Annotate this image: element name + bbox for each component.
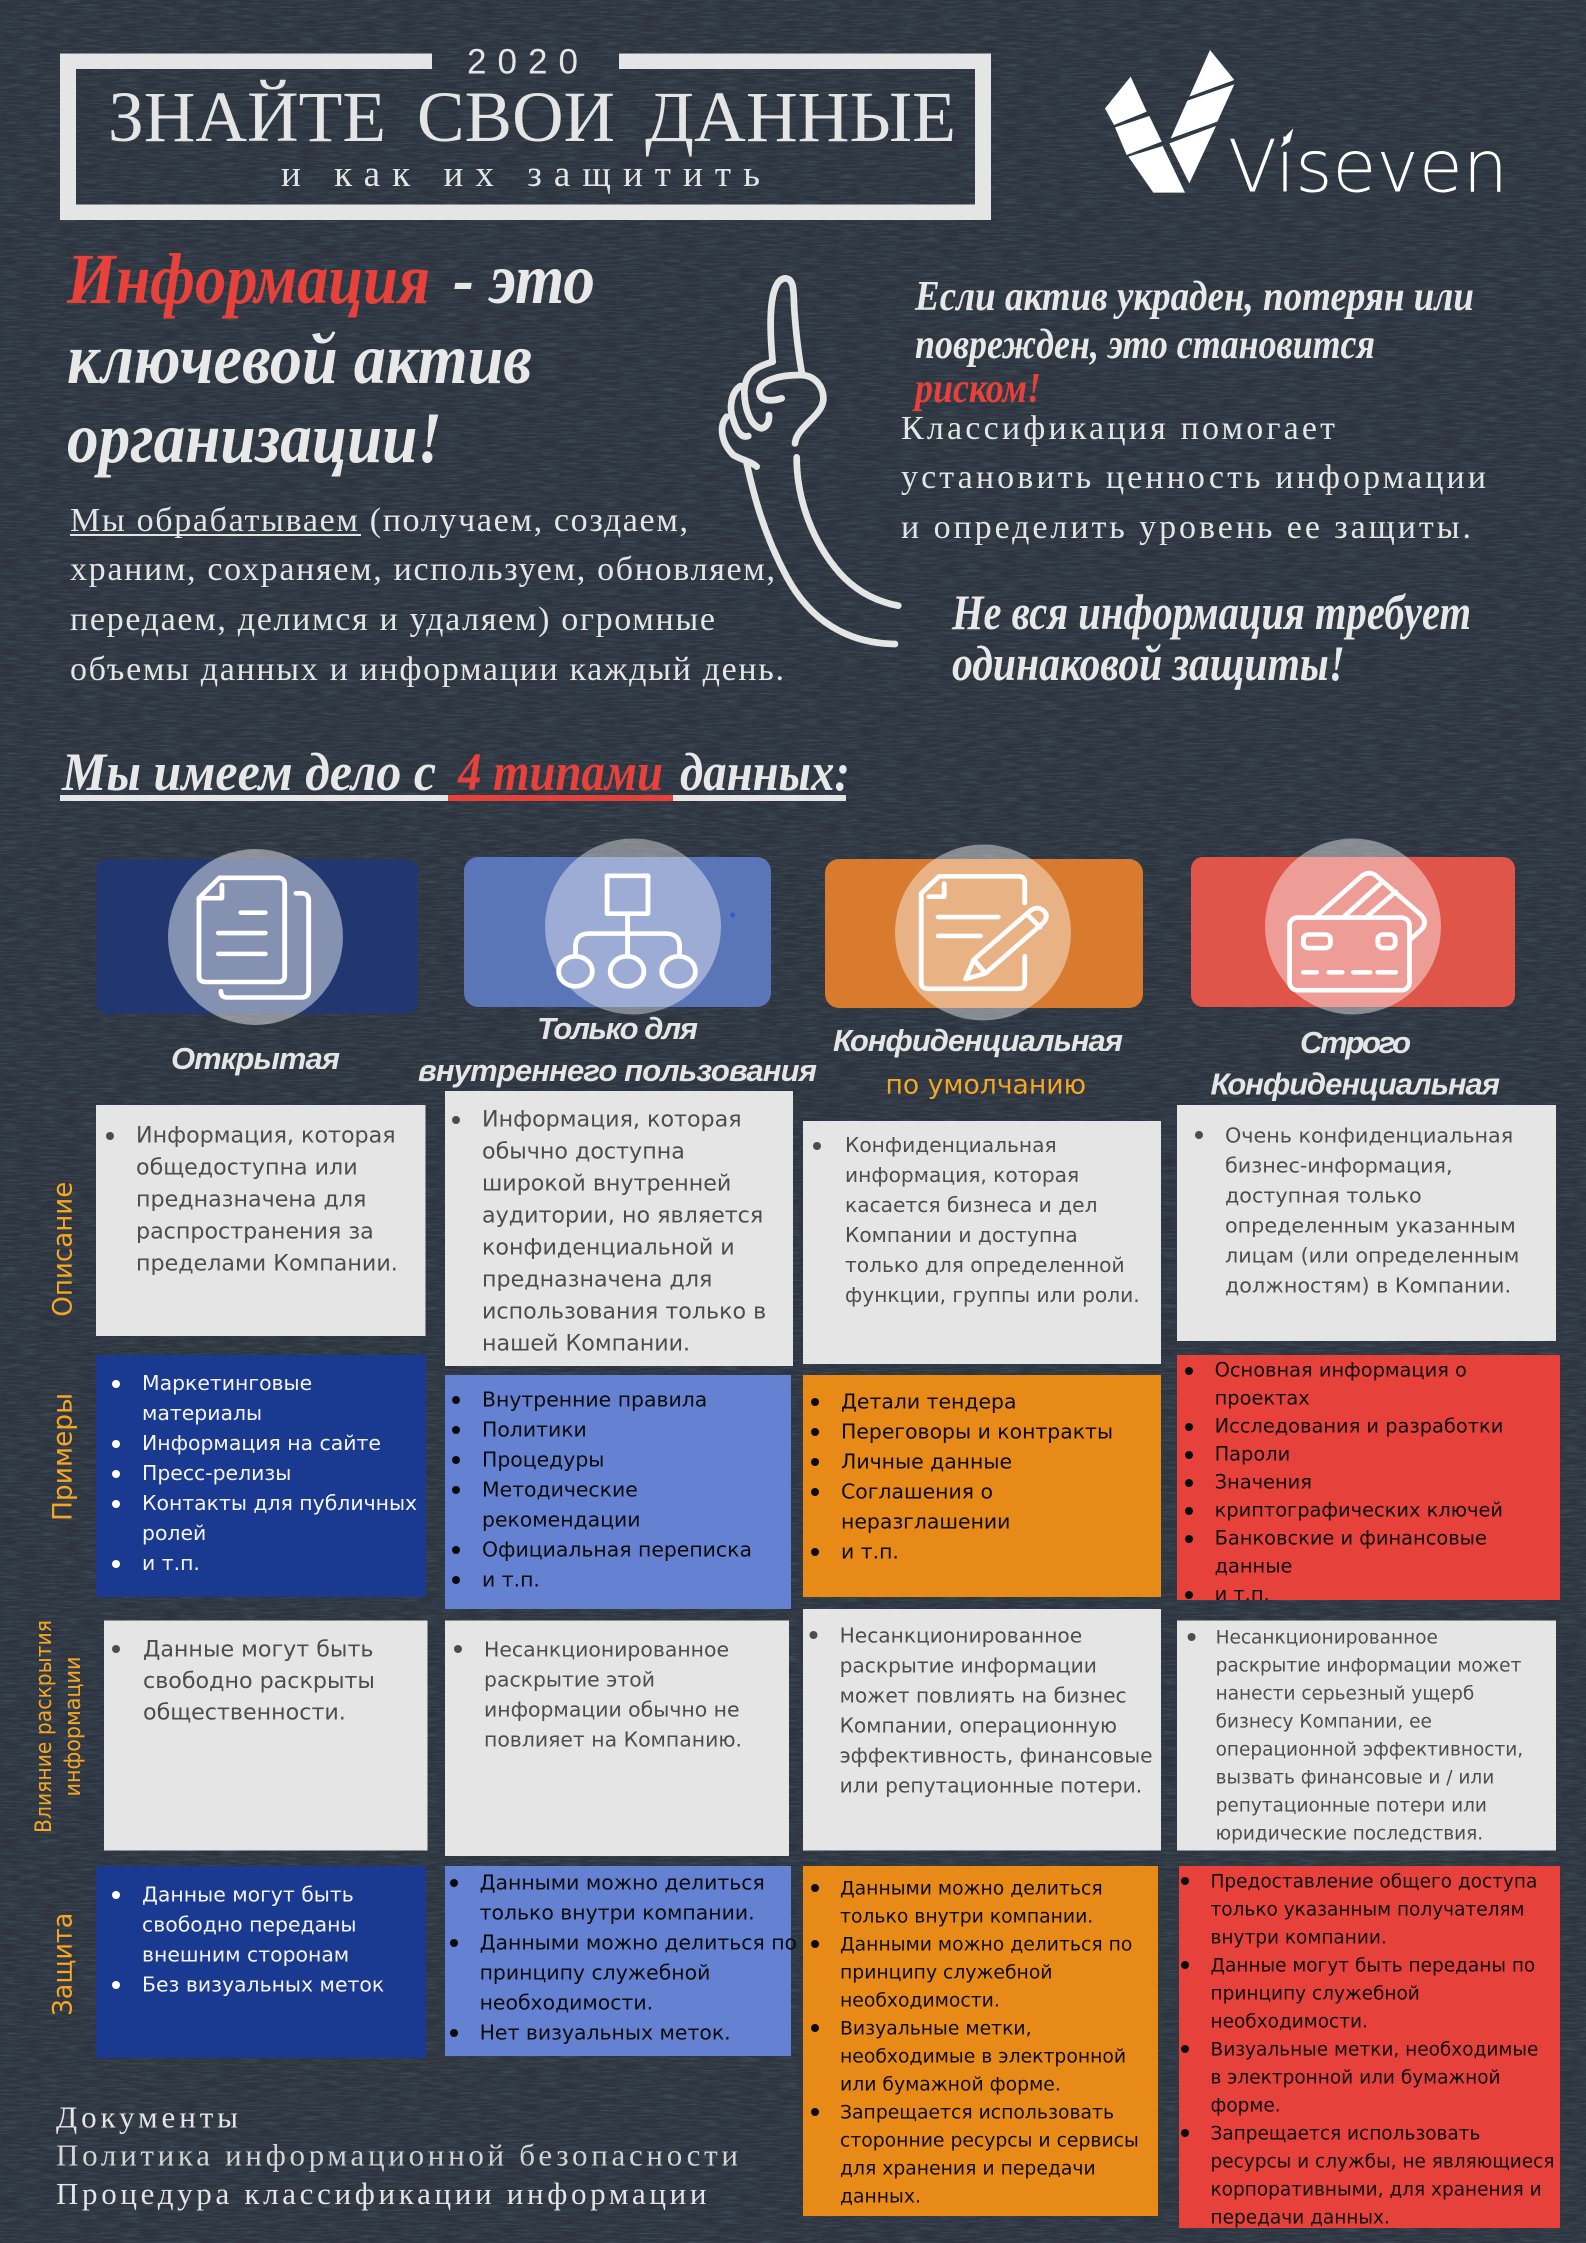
protection: internal: принципу служебной (480, 1960, 710, 1984)
protection: confidential: или бумажной форме. (840, 2074, 1061, 2096)
column heading: strictly confidential: Конфиденциальная (1210, 1066, 1500, 1102)
description: confidential: только для определенной (845, 1253, 1125, 1277)
row label: disclosure impact: информации (61, 1656, 86, 1796)
footer: documents: Политика информационной безопасности (56, 2138, 738, 2172)
impact: confidential: раскрытие информации (840, 1654, 1097, 1678)
examples: strictly confidential: криптографических ключей (1215, 1498, 1503, 1522)
footer: documents: Процедура классификации информации (56, 2176, 706, 2211)
protection: confidential: Данными можно делиться (840, 1878, 1103, 1900)
impact: public: свободно раскрыты (143, 1668, 375, 1694)
icon panel: internal (464, 838, 771, 1014)
row label: disclosure impact (32, 1620, 86, 1833)
main title: СВОИ (417, 77, 615, 157)
protection: confidential: Данными можно делиться по (840, 1934, 1132, 1956)
protection: strictly confidential: форме. (1210, 2096, 1281, 2116)
description: confidential: Конфиденциальная (845, 1133, 1057, 1157)
text block: we process data: передаем, делимся и удаляем) огромные (70, 601, 715, 638)
text block: classification: и определить уровень ее защиты. (901, 509, 1471, 546)
icon panel: confidential (825, 844, 1143, 1020)
protection: public: внешним сторонам (142, 1942, 349, 1966)
protection: confidential: данных. (840, 2186, 921, 2208)
heading: four data types (60, 742, 850, 802)
protection: public: Без визуальных меток (142, 1972, 384, 1996)
column heading: confidential: Конфиденциальная (833, 1023, 1123, 1058)
protection: confidential (803, 1866, 1158, 2216)
row label: disclosure impact: Влияние раскрытия (32, 1620, 57, 1833)
description: public: предназначена для (136, 1186, 366, 1212)
column heading: strictly confidential (1210, 1025, 1500, 1102)
impact: confidential: эффективность, финансовые (840, 1744, 1153, 1768)
impact: confidential: может повлиять на бизнес (840, 1684, 1127, 1708)
heading: information is a key asset (66, 239, 595, 478)
protection: internal: Данными можно делиться по (480, 1930, 797, 1954)
description: confidential: функции, группы или роли. (845, 1283, 1140, 1307)
impact: strictly confidential: нанести серьезный ущерб (1216, 1684, 1474, 1704)
protection: public: свободно переданы (142, 1912, 357, 1936)
year: 2020 (467, 42, 578, 82)
examples: internal: и т.п. (482, 1568, 540, 1592)
protection: strictly confidential: в электронной или бумажной (1210, 2068, 1501, 2088)
protection: strictly confidential: ресурсы и службы, не являющиеся (1210, 2152, 1554, 2172)
examples: public: ролей (142, 1521, 206, 1545)
description: confidential: касается бизнеса и дел (845, 1193, 1098, 1217)
protection: public: Данные могут быть (142, 1882, 354, 1906)
description: internal: обычно доступна (482, 1138, 685, 1164)
text block: we process data: Мы обрабатываем (получаем, создаем, (70, 502, 688, 539)
row label: protection: Защита (48, 1913, 78, 2016)
impact: strictly confidential: бизнесу Компании, ее (1216, 1712, 1432, 1732)
examples: public: и т.п. (142, 1551, 200, 1575)
heading: four data types: 4 типами (457, 742, 663, 802)
description: internal: Информация, которая (482, 1106, 742, 1132)
callout: not all information: Не вся информация требует (951, 584, 1471, 640)
heading: four data types: Мы имеем дело с (61, 742, 436, 802)
row label: description: Описание (48, 1182, 78, 1317)
impact: public: Данные могут быть (143, 1636, 373, 1662)
examples: public: материалы (142, 1401, 262, 1425)
impact: strictly confidential: раскрытие информации может (1216, 1656, 1522, 1676)
examples: strictly confidential: проектах (1215, 1386, 1310, 1410)
protection: internal (445, 1866, 797, 2056)
examples: strictly confidential (1177, 1355, 1560, 1606)
icon: hand pointing up (722, 278, 898, 644)
protection: strictly confidential: Визуальные метки, необходимые (1210, 2040, 1538, 2060)
description: public: распространения за (136, 1218, 374, 1244)
impact: confidential: или репутационные потери. (840, 1774, 1142, 1798)
examples: public: Информация на сайте (142, 1431, 381, 1455)
logo: Viseven: Viseven (1228, 124, 1508, 208)
callout: not all information (951, 584, 1471, 691)
impact: strictly confidential: операционной эффективности, (1216, 1740, 1523, 1760)
description: strictly confidential: должностям) в Компании. (1225, 1274, 1511, 1298)
protection: strictly confidential: необходимости. (1210, 2012, 1368, 2032)
protection: confidential: принципу служебной (840, 1962, 1053, 1984)
heading: information is a key asset: Информация (66, 239, 430, 319)
text block: classification (901, 410, 1486, 546)
protection: public (96, 1866, 426, 2058)
description: strictly confidential: лицам (или определенным (1225, 1244, 1519, 1268)
impact: strictly confidential: вызвать финансовые и / или (1216, 1768, 1494, 1788)
footer: documents: Документы (56, 2100, 238, 2134)
description: public: общедоступна или (136, 1154, 358, 1180)
callout: asset risk: Если актив украден, потерян или (914, 274, 1474, 320)
description: internal: использования только в (482, 1298, 766, 1324)
column heading: internal: внутреннего пользования (418, 1053, 817, 1088)
icon panel: public (96, 849, 418, 1025)
examples: confidential (803, 1375, 1161, 1597)
examples: strictly confidential: Банковские и финансовые (1215, 1526, 1487, 1550)
impact: strictly confidential (1177, 1620, 1556, 1850)
examples: strictly confidential: Основная информация о (1215, 1358, 1467, 1382)
protection: confidential: Запрещается использовать (840, 2102, 1114, 2124)
protection: strictly confidential: принципу служебной (1210, 1984, 1420, 2004)
column heading: confidential (833, 1023, 1123, 1100)
protection: internal: Данными можно делиться (480, 1870, 765, 1894)
examples: internal: Методические (482, 1478, 638, 1502)
impact: internal: повлияет на Компанию. (484, 1728, 742, 1752)
description: confidential: Компании и доступна (845, 1223, 1078, 1247)
examples: confidential: Соглашения о (841, 1480, 993, 1504)
protection: confidential: сторонние ресурсы и сервисы (840, 2130, 1139, 2152)
footer: documents (56, 2100, 738, 2211)
examples: public: Маркетинговые (142, 1371, 312, 1395)
examples: internal: Внутренние правила (482, 1388, 707, 1412)
examples: public: Контакты для публичных (142, 1491, 417, 1515)
examples: confidential: и т.п. (841, 1540, 899, 1564)
protection: strictly confidential: только указанным получателям (1210, 1900, 1524, 1920)
row label: examples: Примеры (48, 1393, 78, 1521)
text block: we process data: объемы данных и информации каждый день. (70, 651, 784, 688)
impact: confidential: Несанкционированное (840, 1624, 1082, 1648)
text block: classification: Классификация помогает (901, 410, 1335, 447)
examples: strictly confidential: Исследования и разработки (1215, 1414, 1503, 1438)
heading: information is a key asset: ключевой актив (67, 319, 532, 399)
protection: internal: только внутри компании. (480, 1900, 755, 1924)
callout: asset risk: риском! (912, 366, 1041, 412)
protection: strictly confidential: передачи данных. (1210, 2208, 1390, 2228)
examples: confidential: Личные данные (841, 1450, 1012, 1474)
examples: public (96, 1355, 426, 1597)
impact: internal (445, 1620, 789, 1856)
examples: strictly confidential: Пароли (1215, 1442, 1290, 1466)
impact: internal: раскрытие этой (484, 1668, 655, 1692)
heading: information is a key asset: - это (453, 239, 595, 319)
protection: strictly confidential: внутри компании. (1210, 1928, 1387, 1948)
callout: asset risk (912, 274, 1474, 412)
protection: strictly confidential (1179, 1866, 1560, 2228)
protection: internal: необходимости. (480, 1990, 653, 2014)
description: internal: широкой внутренней (482, 1170, 731, 1196)
protection: internal: Нет визуальных меток. (480, 2020, 731, 2044)
examples: confidential: Переговоры и контракты (841, 1420, 1113, 1444)
column heading: internal: Только для (537, 1011, 698, 1046)
icon panel: strictly confidential (1191, 838, 1515, 1014)
protection: strictly confidential: корпоративными, для хранения и (1210, 2180, 1542, 2200)
protection: confidential: необходимые в электронной (840, 2046, 1126, 2068)
impact: strictly confidential: Несанкционированное (1216, 1628, 1438, 1648)
column heading: public: Открытая (171, 1041, 340, 1076)
column heading: confidential: по умолчанию (886, 1070, 1086, 1100)
column heading: strictly confidential: Строго (1300, 1025, 1411, 1060)
callout: asset risk: поврежден, это становится (915, 322, 1375, 368)
heading: four data types: данных: (680, 742, 850, 802)
examples: confidential: неразглашении (841, 1510, 1010, 1534)
impact: strictly confidential: репутационные потери или (1216, 1796, 1487, 1816)
text block: we process data (70, 502, 784, 688)
protection: strictly confidential: Предоставление общего доступа (1210, 1872, 1537, 1892)
examples: internal (445, 1375, 791, 1609)
heading: information is a key asset: организации! (67, 398, 442, 478)
examples: internal: Политики (482, 1418, 587, 1442)
main title (108, 77, 956, 157)
description: internal: конфиденциальной и (482, 1234, 735, 1260)
description: strictly confidential: бизнес-информация, (1225, 1154, 1453, 1178)
description: internal: предназначена для (482, 1266, 712, 1292)
protection: strictly confidential: Запрещается использовать (1210, 2124, 1480, 2144)
protection: confidential: Визуальные метки, (840, 2018, 1032, 2040)
impact: public: общественности. (143, 1700, 346, 1726)
protection: strictly confidential: Данные могут быть переданы по (1210, 1956, 1535, 1976)
description: public (96, 1105, 426, 1336)
text block: classification: установить ценность информации (901, 459, 1486, 496)
callout: not all information: одинаковой защиты! (952, 635, 1345, 691)
description: public: Информация, которая (136, 1122, 396, 1148)
description: strictly confidential: Очень конфиденциальная (1225, 1124, 1513, 1148)
subtitle: и как их защитить (281, 154, 760, 195)
examples: internal: Официальная переписка (482, 1538, 752, 1562)
title frame with heading (60, 42, 991, 220)
description: confidential (803, 1121, 1161, 1364)
description: strictly confidential: доступная только (1225, 1184, 1422, 1208)
impact: internal: Несанкционированное (484, 1638, 729, 1662)
logo: Viseven (1105, 50, 1508, 208)
examples: strictly confidential: Значения (1215, 1470, 1312, 1494)
description: internal: аудитории, но является (482, 1202, 763, 1228)
protection: confidential: необходимости. (840, 1990, 1000, 2012)
description: strictly confidential (1177, 1105, 1556, 1341)
main title: ЗНАЙТЕ (108, 77, 386, 157)
examples: internal: рекомендации (482, 1508, 641, 1532)
protection: confidential: для хранения и передачи (840, 2158, 1096, 2180)
impact: confidential (803, 1609, 1161, 1850)
impact: confidential: Компании, операционную (840, 1714, 1117, 1738)
impact: strictly confidential: юридические последствия. (1216, 1824, 1483, 1844)
protection: confidential: только внутри компании. (840, 1906, 1093, 1928)
impact: public (104, 1620, 428, 1850)
examples: confidential: Детали тендера (841, 1390, 1016, 1414)
description: internal (445, 1091, 793, 1366)
description: strictly confidential: определенным указанным (1225, 1214, 1516, 1238)
examples: strictly confidential: и т.п. (1215, 1582, 1270, 1606)
examples: internal: Процедуры (482, 1448, 604, 1472)
description: internal: нашей Компании. (482, 1330, 690, 1356)
examples: public: Пресс-релизы (142, 1461, 291, 1485)
description: public: пределами Компании. (136, 1250, 398, 1276)
impact: internal: информации обычно не (484, 1698, 740, 1722)
text block: we process data: храним, сохраняем, используем, обновляем, (70, 551, 775, 588)
main title: ДАННЫЕ (645, 77, 956, 157)
examples: strictly confidential: данные (1215, 1554, 1292, 1578)
description: confidential: информация, которая (845, 1163, 1079, 1187)
column heading: internal (418, 1011, 817, 1088)
